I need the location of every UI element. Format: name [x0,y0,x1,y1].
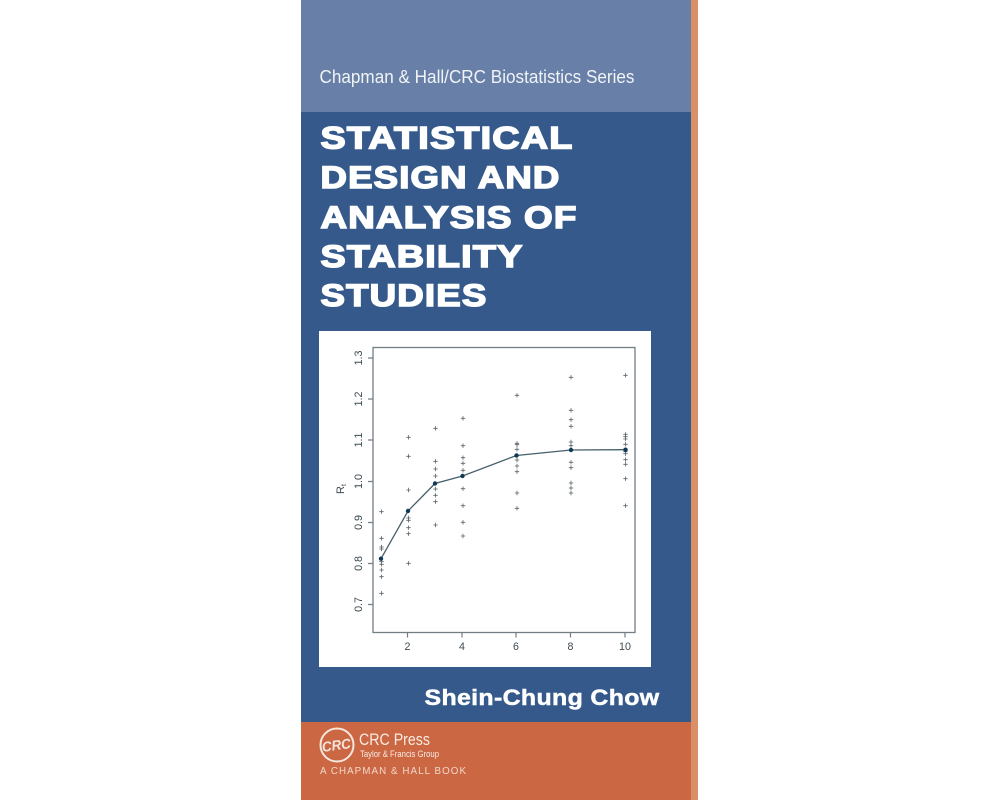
x axis ticks and labels: 10 [619,641,631,653]
scatter points [379,373,628,596]
title: ANALYSIS OF [320,199,578,235]
y axis label: R [335,486,347,494]
book cover background [301,0,691,800]
icon: CRC logo [320,728,354,762]
icon: CRC logo: CRC [321,735,353,755]
y axis ticks and labels: 0.8 [353,556,365,571]
title: DESIGN AND [320,159,560,195]
y axis ticks and labels: 0.7 [353,597,365,612]
y axis ticks and labels [353,351,373,612]
orange spine strip [691,0,698,800]
title: STATISTICAL [320,120,574,156]
publisher group: Taylor & Francis Group [360,749,439,759]
plot frame [373,348,635,632]
y axis label: t [339,483,348,486]
x axis ticks and labels: 6 [513,641,519,653]
publisher name: CRC Press [359,730,430,749]
title: STUDIES [320,277,488,313]
y axis ticks and labels: 1.0 [353,474,365,489]
title: STABILITY [320,238,524,274]
author: Shein-Chung Chow [424,685,660,710]
imprint: A CHAPMAN & HALL BOOK [320,766,466,777]
y axis ticks and labels: 0.9 [353,515,365,530]
top series band [301,0,691,112]
x axis ticks and labels: 4 [459,641,465,653]
series name: Chapman & Hall/CRC Biostatistics Series [320,67,634,87]
publisher band [301,722,691,800]
y axis ticks and labels: 1.3 [353,351,365,365]
title [320,120,578,313]
x axis ticks and labels: 8 [568,641,574,653]
x axis ticks and labels: 2 [405,641,411,653]
chart panel [319,331,651,667]
mean line with markers [379,448,628,561]
x axis ticks and labels [405,632,631,653]
y axis ticks and labels: 1.2 [353,392,365,406]
y axis ticks and labels: 1.1 [353,433,365,447]
